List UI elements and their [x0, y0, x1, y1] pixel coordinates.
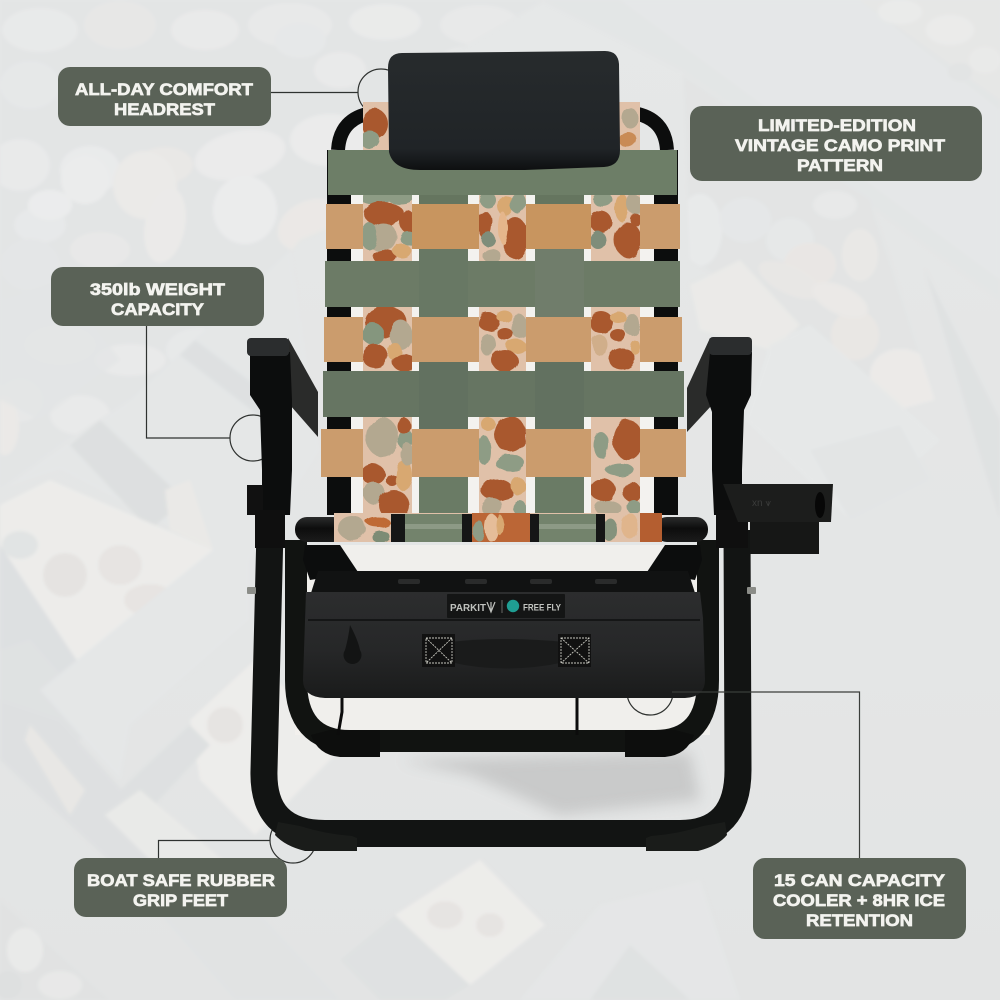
cooler zipper pull	[344, 625, 361, 664]
leader circle: cooler	[627, 669, 673, 715]
callout: cooler: 15 CAN CAPACITY	[774, 871, 946, 890]
callout: weight capacity: 350lb WEIGHT	[90, 280, 226, 299]
bag straps	[338, 698, 577, 735]
left armrest	[247, 338, 318, 548]
cup holder: xn ⩛	[752, 498, 771, 509]
callout: cooler: COOLER + 8HR ICE	[773, 891, 945, 910]
leader: headrest	[271, 69, 404, 115]
callout: headrest	[58, 67, 271, 126]
right armrest	[687, 337, 752, 548]
callout: cooler	[753, 858, 966, 939]
webbing: tan rows	[321, 204, 686, 477]
pale floor behind chair	[295, 545, 710, 735]
floor shadow under chair	[400, 752, 700, 815]
callout: rubber feet	[74, 858, 287, 917]
callout: camo pattern: PATTERN	[797, 156, 883, 175]
callout: rubber feet: GRIP FEET	[133, 891, 229, 910]
leader: rubber feet	[158, 817, 316, 863]
callout: rubber feet: BOAT SAFE RUBBER	[87, 871, 275, 890]
webbing: green rows	[323, 150, 684, 515]
handle patch left	[422, 634, 455, 667]
side pins	[247, 587, 756, 594]
callout: headrest: HEADREST	[114, 100, 216, 119]
callout: camo pattern	[690, 106, 982, 181]
webbing: green verticals	[419, 165, 584, 515]
cooler brand label: FREE FLY	[523, 602, 562, 614]
callout: weight capacity: CAPACITY	[111, 300, 205, 319]
callout: camo pattern: VINTAGE CAMO PRINT	[735, 136, 946, 155]
callout: weight capacity	[51, 267, 264, 326]
chair frame legs	[264, 530, 738, 834]
headrest	[388, 51, 620, 170]
cooler brand label	[447, 594, 565, 618]
inner feet	[311, 730, 694, 757]
handle patch right	[558, 634, 591, 667]
leader line: cooler	[672, 692, 860, 858]
cooler bag	[303, 571, 705, 698]
rubber feet	[275, 822, 727, 851]
seat hinge brackets	[303, 545, 702, 580]
cooler brand label: PARKIT	[450, 602, 487, 614]
back frame and light backing	[327, 113, 678, 515]
callout: headrest: ALL-DAY COMFORT	[75, 80, 254, 99]
seat front tube	[295, 513, 708, 543]
webbing: camo verticals	[360, 102, 643, 520]
callout: cooler: RETENTION	[806, 911, 913, 930]
callout: camo pattern: LIMITED-EDITION	[758, 116, 916, 135]
cooler handle	[450, 639, 565, 668]
cup holder	[723, 484, 833, 554]
leader: weight capacity	[146, 326, 276, 461]
chair	[247, 51, 833, 851]
